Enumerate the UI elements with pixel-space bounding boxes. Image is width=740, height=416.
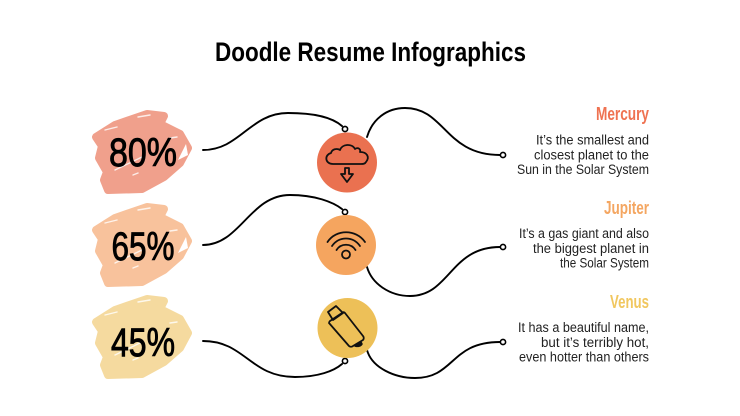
connector: cloud icon to Mercury <box>367 108 500 155</box>
scribble blob: 45% <box>96 299 188 375</box>
panel: 65% row left <box>96 207 188 283</box>
scribble blob: 80% <box>96 114 188 190</box>
heading: Jupiter: Jupiter <box>604 198 649 218</box>
description: Jupiter: It’s a gas giant and also <box>519 226 649 241</box>
scribble blob: 65% <box>96 207 188 283</box>
icon: cloud download <box>317 132 377 192</box>
description: Mercury <box>517 132 649 177</box>
description: Jupiter: the biggest planet in <box>533 241 649 256</box>
description: Jupiter <box>519 226 649 270</box>
icon: USB drive <box>318 298 378 358</box>
description: Venus: It has a beautiful name, <box>518 320 649 335</box>
description: Venus <box>518 320 649 364</box>
title: Doodle Resume Infographics <box>215 37 526 67</box>
connector: USB icon to Venus <box>367 342 500 378</box>
connector: 80% to cloud icon <box>203 113 342 150</box>
text block: Mercury <box>517 104 649 177</box>
description: Mercury: Sun in the Solar System <box>517 162 649 177</box>
description: Mercury: It’s the smallest and <box>536 132 649 148</box>
connector: wifi icon to Jupiter <box>367 247 500 296</box>
heading: Mercury: Mercury <box>596 104 649 124</box>
percent: 65%: 65% <box>112 225 174 269</box>
panel: 45% row left <box>96 299 188 375</box>
panel: 80% row left <box>96 114 188 190</box>
text block: Jupiter <box>519 198 649 270</box>
description: Venus: but it’s terribly hot, <box>541 335 649 350</box>
heading: Venus: Venus <box>610 292 649 312</box>
description: Jupiter: the Solar System <box>560 256 649 270</box>
connector: 45% to USB icon <box>203 341 342 377</box>
icon: wifi <box>316 215 376 275</box>
connector dots <box>342 126 506 364</box>
description: Mercury: closest planet to the <box>534 148 649 162</box>
description: Venus: even hotter than others <box>519 350 649 364</box>
text block: Venus <box>518 292 649 364</box>
percent: 80%: 80% <box>109 131 177 175</box>
connector: 65% to wifi icon <box>203 195 342 245</box>
percent: 45%: 45% <box>111 321 175 365</box>
